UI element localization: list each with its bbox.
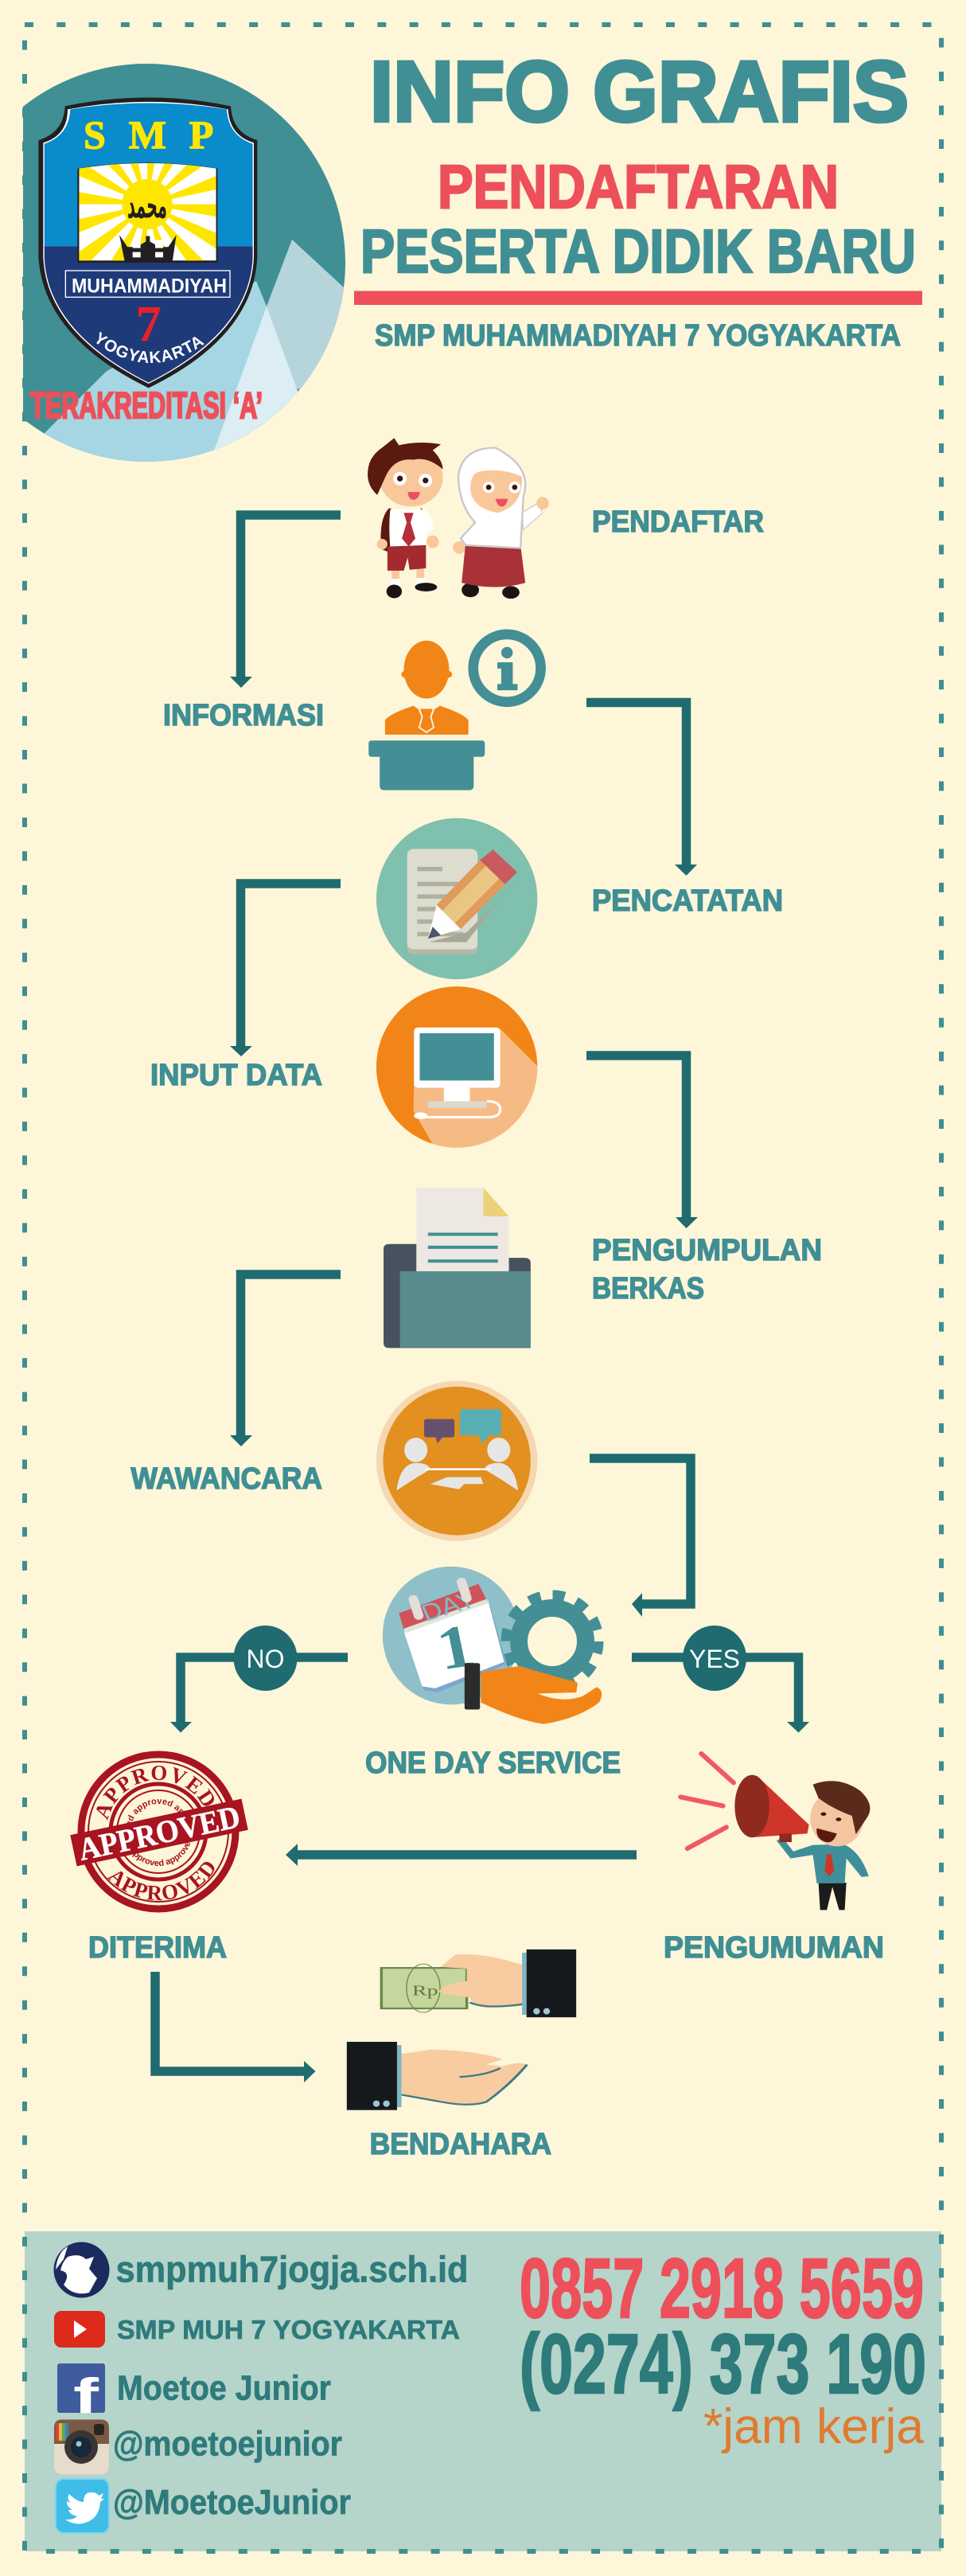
arrow: YES branch: YES — [689, 1645, 740, 1673]
label: DITERIMA: DITERIMA — [88, 1931, 227, 1965]
facebook text: Moetoe Junior — [117, 2369, 331, 2407]
man — [777, 1781, 870, 1910]
icon: approved stamp: ved approved app — [127, 1799, 183, 1823]
icon: document folder — [384, 1188, 531, 1348]
boy — [368, 438, 443, 598]
calendar: DAY — [417, 1586, 480, 1626]
icon: announcer with megaphone — [680, 1754, 870, 1910]
arrow: pengumuman to diterima — [286, 1844, 637, 1866]
icon: twitter — [56, 2479, 109, 2533]
arrow: NO branch: NO — [247, 1645, 285, 1673]
icon: approved stamp: APPROVED — [107, 1861, 215, 1901]
label: INFORMASI: INFORMASI — [163, 699, 324, 732]
MUHAMMADIYAH box: MUHAMMADIYAH — [72, 275, 227, 297]
sun panel — [77, 162, 218, 263]
icon: one day service — [383, 1567, 602, 1724]
icon: youtube — [54, 2311, 105, 2348]
arrow: wawancara to one day service — [590, 1458, 691, 1617]
icon: facebook: f — [73, 2369, 99, 2424]
YOGYAKARTA curved: YOGYAKARTA — [96, 331, 204, 363]
arrow: berkas to wawancara — [230, 1274, 341, 1446]
arrow: pendaftar to informasi — [230, 515, 341, 688]
icon: hand giving money: Rp — [412, 1983, 438, 1999]
label: ONE DAY SERVICE: ONE DAY SERVICE — [365, 1747, 621, 1780]
label: PENGUMUMAN: PENGUMUMAN — [664, 1931, 884, 1965]
icon: hand giving money — [381, 1950, 576, 2017]
icon: approved stamp: APPROVED — [76, 1798, 243, 1868]
youtube text: SMP MUH 7 YOGYAKARTA — [117, 2315, 460, 2344]
open book hands — [119, 235, 177, 261]
label: PENDAFTAR: PENDAFTAR — [592, 505, 764, 539]
arrow: input data to pengumpulan berkas — [586, 1056, 698, 1228]
label: PENCATATAN: PENCATATAN — [592, 884, 783, 918]
label: PENGUMPULAN BERKAS — [592, 1234, 822, 1306]
icon: approved stamp: approved approved — [132, 1842, 190, 1866]
icon: facebook — [57, 2363, 105, 2424]
logo badge — [23, 64, 345, 462]
icon: approved stamp — [70, 1751, 248, 1912]
arrow: informasi to pencatatan — [586, 702, 697, 876]
arrow: YES branch — [632, 1626, 809, 1732]
school shield — [38, 97, 258, 388]
label: BENDAHARA: BENDAHARA — [370, 2128, 551, 2161]
subtitle: PENDAFTARAN: PENDAFTARAN — [438, 153, 839, 221]
red divider bar — [354, 291, 922, 305]
contact panel background — [25, 2231, 941, 2551]
icon: information desk — [368, 634, 541, 790]
title: INFO GRAFIS: INFO GRAFIS — [370, 43, 909, 139]
icon: receiving hand — [347, 2042, 527, 2110]
hand — [481, 1666, 602, 1724]
arrow: pencatatan to input data — [230, 884, 341, 1056]
icon: notes and pencil — [376, 818, 537, 979]
icon: interview — [376, 1381, 537, 1541]
icon: approved stamp: APPROVED — [96, 1766, 215, 1820]
gear — [506, 1595, 598, 1688]
working hours note: *jam kerja — [703, 2399, 925, 2454]
label: PENGUMPULAN BERKAS: PENGUMPULAN — [592, 1234, 822, 1267]
megaphone — [734, 1775, 809, 1842]
website text: smpmuh7jogja.sch.id — [116, 2248, 468, 2289]
TERAKREDITASI label: TERAKREDITASI ‘A’ — [30, 384, 263, 426]
twitter text: @MoetoeJunior — [113, 2483, 351, 2522]
school name: SMP MUHAMMADIYAH 7 YOGYAKARTA — [375, 319, 901, 353]
number 7: 7 — [135, 295, 162, 353]
icon: students — [368, 438, 549, 599]
label: PENGUMPULAN BERKAS: BERKAS — [592, 1272, 704, 1306]
SMP letters: SMP — [84, 112, 213, 157]
girl — [453, 447, 549, 599]
icon: computer — [376, 986, 538, 1148]
info symbol — [473, 634, 541, 702]
icon: instagram — [54, 2420, 109, 2474]
instagram text: @moetoejunior — [113, 2425, 342, 2464]
contact panel — [54, 2242, 926, 2533]
label: WAWANCARA: WAWANCARA — [130, 1462, 322, 1496]
label: INPUT DATA: INPUT DATA — [150, 1059, 322, 1092]
decorative circle with mountains — [23, 64, 345, 462]
person — [385, 641, 469, 735]
desk — [368, 740, 485, 757]
arrow: NO branch — [170, 1626, 348, 1732]
sun panel: محمد — [127, 184, 167, 226]
calendar — [399, 1577, 507, 1692]
sound lines — [680, 1754, 734, 1848]
arrow: diterima to bendahara — [155, 1972, 315, 2082]
calendar: 1 — [431, 1612, 481, 1684]
icon: globe — [54, 2242, 110, 2297]
